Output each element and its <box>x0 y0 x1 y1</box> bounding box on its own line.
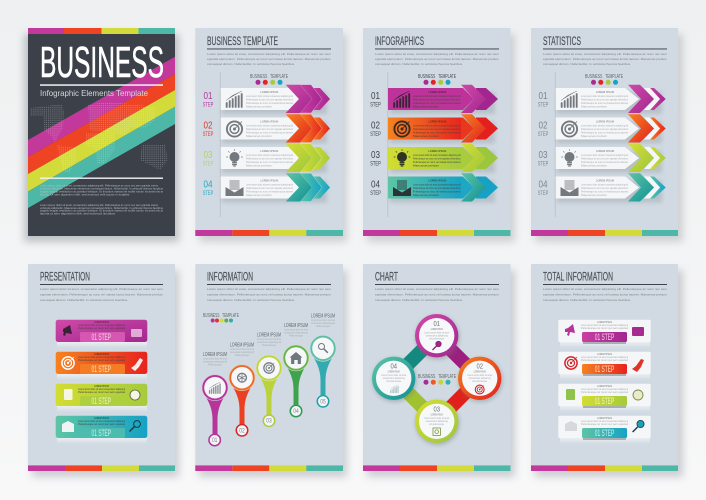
card 1: Pellentesque ac nunc nec sem egestas <box>581 327 629 330</box>
heading: STATISTICS <box>543 36 581 48</box>
card 4 <box>56 416 147 444</box>
card 3: Lorem ipsum dolor sit amet consectetur adipiscing <box>581 388 629 391</box>
intro text: Lorem ipsum dolor sit amet, consectetur adipiscing elit. Pellentesque ac nunc nec sem <box>543 52 668 56</box>
step row 03: Pellentesque ac nunc nec sem egestas elementum <box>581 158 628 161</box>
step row 01: Maecenas pretium <box>581 106 607 109</box>
pin 03: consectetur adipiscing elit <box>257 341 281 344</box>
footer colour bar <box>195 230 343 236</box>
card 3: LOREM IPSUM <box>597 384 612 388</box>
step row 01: LOREM IPSUM <box>260 90 279 94</box>
card 4: Pellentesque ac nunc nec sem egestas <box>581 423 629 426</box>
pin 01: LOREM IPSUM <box>203 352 227 358</box>
card 2: LOREM IPSUM <box>94 352 109 356</box>
card 1: LOREM IPSUM <box>94 320 109 324</box>
card 1: 01 STEP <box>92 332 111 342</box>
card 1: LOREM IPSUM <box>597 320 612 324</box>
intro text: consequat dictum. Nulla facilisi. In vehicula rhoncus faucibus. <box>207 298 295 302</box>
step row 04 <box>203 173 330 202</box>
step row 01: Maecenas pretium <box>413 106 439 109</box>
card 4: LOREM IPSUM <box>597 416 612 420</box>
heading: PRESENTATION <box>40 272 90 284</box>
panel: information <box>195 264 347 477</box>
step row 03: Maecenas pretium <box>581 165 607 168</box>
step row 04: 04 <box>371 178 380 190</box>
step row 01: Pellentesque ac nunc nec sem egestas elementum <box>246 99 293 102</box>
card 2 <box>56 352 147 380</box>
step row 02: LOREM IPSUM <box>596 120 614 124</box>
intro text: consequat dictum. Nulla facilisi. In vehicula rhoncus faucibus. <box>207 62 295 66</box>
legend <box>203 313 239 322</box>
pin 02: LOREM IPSUM <box>230 342 254 348</box>
step row 04: Pellentesque ac nunc nec sem egestas elementum <box>413 187 461 190</box>
step row 03: Maecenas pretium <box>413 165 439 168</box>
panel: statistics <box>531 28 683 242</box>
pin 01 <box>202 352 228 446</box>
card 2: Lorem ipsum dolor sit amet consectetur adipiscing <box>581 356 629 359</box>
footer colour bar <box>531 465 678 471</box>
step row 04: LOREM IPSUM <box>260 178 279 182</box>
node 04: consectetur adipiscing <box>383 377 405 380</box>
step row 04: Pellentesque ac nunc vel massa luctus laoreet <box>581 191 628 194</box>
cover body text: vehicula sollicitudin. Maecenas elementum consequat dictum. Nulla facilisi. In vehicula rhoncus faucibus <box>40 186 164 190</box>
node 01: 01 <box>433 319 440 328</box>
intro text: Lorem ipsum dolor sit amet, consectetur adipiscing elit. Pellentesque ac nunc nec sem <box>375 287 500 291</box>
intro text: Lorem ipsum dolor sit amet, consectetur adipiscing elit. Pellentesque ac nunc nec sem <box>207 52 332 56</box>
step row 01: Pellentesque ac nunc nec sem egestas elementum <box>413 99 461 102</box>
cover body text: Lorem ipsum dolor sit amet, consectetur adipiscing elit. Pellentesque ac nunc nec sem gravida metus <box>40 203 159 207</box>
heading: BUSINESS TEMPLATE <box>207 36 278 48</box>
intro text <box>40 287 164 302</box>
step row 04: Maecenas pretium <box>413 194 439 197</box>
cover colour stripes <box>28 57 175 208</box>
step row 04: Pellentesque ac nunc vel massa luctus laoreet <box>246 191 293 194</box>
pin 04: consectetur adipiscing elit <box>284 331 308 334</box>
pin 05: LOREM IPSUM <box>311 313 335 319</box>
step row 03: 03 <box>204 149 213 161</box>
card 3: Lorem ipsum dolor sit amet consectetur adipiscing <box>78 388 126 391</box>
step row 02 <box>203 114 330 144</box>
intro text: Lorem ipsum dolor sit amet, consectetur adipiscing elit. Pellentesque ac nunc nec sem <box>543 287 668 291</box>
step row 03: 03 <box>371 149 380 161</box>
step row 02: LOREM IPSUM <box>428 120 447 124</box>
step row 04: Lorem ipsum dolor sit amet consectetur adipiscing elit <box>413 184 461 186</box>
step row 02: Pellentesque ac nunc nec sem egestas elementum <box>413 128 461 131</box>
cover body text: Lorem ipsum dolor sit amet, consectetur adipiscing elit. Pellentesque ac nunc nec sem gravida metus <box>40 184 159 188</box>
card 1 <box>558 320 651 348</box>
pin 02 <box>229 342 255 437</box>
card 3: Pellentesque ac nunc nec sem egestas <box>78 391 126 394</box>
step row 04: Lorem ipsum dolor sit amet consectetur adipiscing elit <box>581 184 628 186</box>
footer colour bar <box>363 465 510 471</box>
step row 01: 01 <box>371 90 380 102</box>
pin 01: Pellentesque <box>208 364 223 366</box>
step row 04 <box>370 173 498 202</box>
card 2: Pellentesque ac nunc nec sem egestas <box>581 359 629 362</box>
pin 04: 04 <box>293 409 299 415</box>
step row 03: LOREM IPSUM <box>260 149 279 153</box>
pin 04: Lorem ipsum dolor sit amet <box>284 328 308 331</box>
card 4: 01 STEP <box>595 428 614 438</box>
step row 04: Lorem ipsum dolor sit amet consectetur adipiscing elit <box>246 184 293 186</box>
step row 01 <box>370 85 498 114</box>
step row 01 <box>538 85 666 114</box>
node 03: elit pellentesque <box>429 423 445 426</box>
node 04 <box>372 357 416 402</box>
step row 04: 04 <box>538 178 548 190</box>
panel: presentation <box>28 264 179 477</box>
step row 01: Lorem ipsum dolor sit amet consectetur adipiscing elit <box>581 95 628 98</box>
card 3: LOREM IPSUM <box>94 384 109 388</box>
intro text: Lorem ipsum dolor sit amet, consectetur adipiscing elit. Pellentesque ac nunc nec sem <box>40 287 164 291</box>
pin 02: Pellentesque <box>235 354 250 357</box>
step row 01 <box>203 85 330 114</box>
step row 04: Maecenas pretium <box>246 194 272 197</box>
pin 01: 01 <box>212 438 218 444</box>
card 1: Lorem ipsum dolor sit amet consectetur adipiscing <box>78 324 126 327</box>
card 4: Pellentesque ac nunc nec sem egestas <box>78 423 126 426</box>
panel: chart <box>363 264 515 477</box>
cover title: BUSINESS <box>40 38 164 87</box>
intro text: egestas elementum. Pellentesque ac nunc vel massa luctus laoreet. Maecenas pretium <box>375 292 500 296</box>
step row 03: Maecenas pretium <box>246 165 272 168</box>
node 01 <box>415 314 460 360</box>
card 2: LOREM IPSUM <box>597 352 612 356</box>
step row 01: STEP <box>203 103 213 109</box>
step row 01: STEP <box>370 103 381 109</box>
cover body text: sagittis feugiat vestibulum ac porttitor tristique. Ut tincidunt massa vel mollis rutrum sit amet nisi at <box>40 209 163 213</box>
step row 02: 02 <box>204 120 213 132</box>
node 03: LOREM IPSUM <box>431 413 443 417</box>
node 01: elit pellentesque <box>429 338 445 340</box>
step row 03: Lorem ipsum dolor sit amet consectetur adipiscing elit <box>581 154 628 157</box>
node 02: elit pellentesque <box>472 380 488 383</box>
legend <box>250 74 288 85</box>
step row 04: 04 <box>204 178 213 190</box>
step row 02: Pellentesque ac nunc nec sem egestas elementum <box>581 128 628 131</box>
legend: BUSINESS TEMPLATE <box>203 313 239 319</box>
heading: TOTAL INFORMATION <box>543 272 613 284</box>
step row 03: Pellentesque ac nunc nec sem egestas elementum <box>246 158 293 161</box>
card 4: LOREM IPSUM <box>94 416 109 420</box>
pin 03: 03 <box>266 419 272 425</box>
card 2: 01 STEP <box>595 364 614 374</box>
step row 02 <box>538 114 666 144</box>
step row 01: Lorem ipsum dolor sit amet consectetur adipiscing elit <box>413 95 461 98</box>
step row 03: Pellentesque ac nunc vel massa luctus laoreet <box>581 161 628 164</box>
card 1: Pellentesque ac nunc nec sem egestas <box>78 327 126 330</box>
pin 04: Pellentesque <box>289 334 304 337</box>
step row 01: 01 <box>538 90 548 102</box>
step row 04: STEP <box>203 191 213 197</box>
node 03: 03 <box>433 404 440 414</box>
heading: INFORMATION <box>207 272 253 284</box>
pin 05: consectetur adipiscing elit <box>311 322 335 325</box>
pin 02: consectetur adipiscing elit <box>230 351 254 354</box>
cover body text <box>40 184 164 216</box>
step row 04: Pellentesque ac nunc nec sem egestas elementum <box>246 187 293 190</box>
intro text <box>375 287 500 302</box>
card 3: Pellentesque ac nunc nec sem egestas <box>581 391 629 394</box>
intro text: egestas elementum. Pellentesque ac nunc vel massa luctus laoreet. Maecenas pretium <box>375 57 500 61</box>
step row 01: Pellentesque ac nunc nec sem egestas elementum <box>581 99 628 102</box>
step row 04 <box>538 173 666 202</box>
step row 03: Pellentesque ac nunc vel massa luctus laoreet <box>413 161 461 164</box>
step row 04: STEP <box>370 191 381 197</box>
step row 02: Maecenas pretium <box>246 135 272 138</box>
node 03 <box>415 400 460 445</box>
intro text <box>375 52 500 66</box>
card 4: Lorem ipsum dolor sit amet consectetur adipiscing <box>581 420 629 423</box>
panel: business template <box>195 28 347 242</box>
node 03: Lorem ipsum dolor sit amet <box>424 417 450 420</box>
step row 04: Pellentesque ac nunc vel massa luctus laoreet <box>413 191 461 194</box>
connector bars <box>394 336 480 421</box>
card 2: Pellentesque ac nunc nec sem egestas <box>78 359 126 362</box>
intro text: egestas elementum. Pellentesque ac nunc vel massa luctus laoreet. Maecenas pretium <box>207 292 332 296</box>
step row 03: LOREM IPSUM <box>596 149 614 153</box>
footer colour bar <box>531 230 678 236</box>
pin 02: 02 <box>239 428 245 434</box>
card 4: Lorem ipsum dolor sit amet consectetur adipiscing <box>78 420 126 423</box>
cover body text: sagittis feugiat vestibulum ac porttitor tristique. Ut tincidunt massa vel mollis rutrum sit amet nisi at <box>40 190 163 194</box>
step row 01: Lorem ipsum dolor sit amet consectetur adipiscing elit <box>246 95 293 98</box>
intro text: egestas elementum. Pellentesque ac nunc vel massa luctus laoreet. Maecenas pretium <box>543 292 668 296</box>
step row 03: LOREM IPSUM <box>428 149 447 153</box>
step row 02: STEP <box>203 132 213 138</box>
footer colour bar <box>195 465 343 471</box>
legend: BUSINESS TEMPLATE <box>585 74 623 80</box>
step row 04: Pellentesque ac nunc nec sem egestas elementum <box>581 187 628 190</box>
node 02: 02 <box>476 362 483 370</box>
step row 02: Pellentesque ac nunc vel massa luctus laoreet <box>581 132 628 135</box>
dotted world map <box>30 103 168 172</box>
panel: total information <box>531 264 683 477</box>
legend <box>418 74 456 85</box>
card 2: 01 STEP <box>92 364 111 374</box>
intro text <box>543 287 668 302</box>
node 04: Lorem ipsum dolor sit amet <box>381 374 407 377</box>
cover body text: lacinia ut sem dignissim nibh, sed euismod tincidunt. <box>40 212 116 216</box>
node 02 <box>458 357 502 402</box>
step row 01: Pellentesque ac nunc vel massa luctus laoreet <box>581 102 628 105</box>
step row 03: Pellentesque ac nunc nec sem egestas elementum <box>413 158 461 161</box>
card 3 <box>558 384 651 412</box>
intro text: egestas elementum. Pellentesque ac nunc vel massa luctus laoreet. Maecenas pretium <box>207 57 332 61</box>
step row 01: Maecenas pretium <box>246 106 272 109</box>
step row 01: LOREM IPSUM <box>596 90 614 94</box>
legend <box>585 74 623 85</box>
step row 02: 02 <box>371 120 380 132</box>
pin 02: Lorem ipsum dolor sit amet <box>230 348 254 351</box>
intro text <box>207 287 332 302</box>
centre legend <box>418 374 456 385</box>
intro text <box>543 52 668 66</box>
step row 03 <box>538 144 666 173</box>
step row 02: Maecenas pretium <box>581 135 607 138</box>
step row 03: STEP <box>538 162 548 168</box>
node 04: 04 <box>390 362 397 370</box>
pin 03: Lorem ipsum dolor sit amet <box>257 338 281 341</box>
pin 01: Lorem ipsum dolor sit amet <box>203 358 227 360</box>
centre legend: BUSINESS TEMPLATE <box>418 374 456 380</box>
step row 02: 02 <box>538 120 548 132</box>
intro text: consequat dictum. Nulla facilisi. In vehicula rhoncus faucibus. <box>375 298 463 302</box>
step row 02: Pellentesque ac nunc nec sem egestas elementum <box>246 128 293 131</box>
step row 02: LOREM IPSUM <box>260 120 279 124</box>
node 04: LOREM IPSUM <box>388 370 400 374</box>
pin 04: LOREM IPSUM <box>284 323 308 329</box>
pin 03 <box>256 333 282 427</box>
cover body text: vehicula sollicitudin. Maecenas elementum consequat dictum. Nulla facilisi. In vehicula rhoncus faucibus <box>40 206 164 210</box>
pin 05: Pellentesque <box>316 325 331 328</box>
step row 02: Pellentesque ac nunc vel massa luctus laoreet <box>413 132 461 135</box>
footer colour bar <box>363 230 510 236</box>
step row 02: Maecenas pretium <box>413 135 439 138</box>
pin 03: Pellentesque <box>262 344 277 347</box>
heading: INFOGRAPHICS <box>375 36 424 48</box>
step row 02: STEP <box>370 132 381 138</box>
step row 02: STEP <box>538 132 548 138</box>
intro text: Lorem ipsum dolor sit amet, consectetur adipiscing elit. Pellentesque ac nunc nec sem <box>375 52 500 56</box>
card 1: 01 STEP <box>595 332 614 342</box>
footer colour bar <box>28 465 175 471</box>
card 3: 01 STEP <box>595 396 614 406</box>
step row 03: STEP <box>203 162 213 168</box>
card 4 <box>558 416 651 444</box>
cover top colour bar <box>28 28 175 34</box>
legend: BUSINESS TEMPLATE <box>418 74 456 80</box>
node 02: LOREM IPSUM <box>474 370 486 374</box>
step row 02: Pellentesque ac nunc vel massa luctus laoreet <box>246 132 293 135</box>
step row 03: Lorem ipsum dolor sit amet consectetur adipiscing elit <box>413 154 461 157</box>
step row 03 <box>203 144 330 173</box>
card 1: Lorem ipsum dolor sit amet consectetur adipiscing <box>581 324 629 327</box>
card 3: 01 STEP <box>92 396 111 406</box>
pin 04 <box>283 323 309 418</box>
step row 01: STEP <box>538 103 548 109</box>
node 03: consectetur adipiscing <box>426 420 448 423</box>
step row 04: STEP <box>538 191 548 197</box>
intro text: egestas elementum. Pellentesque ac nunc vel massa luctus laoreet. Maecenas pretium <box>40 292 164 296</box>
step row 01: LOREM IPSUM <box>428 90 447 94</box>
card 2 <box>558 352 651 380</box>
step row 01: Pellentesque ac nunc vel massa luctus laoreet <box>413 102 461 105</box>
step row 02 <box>370 114 498 144</box>
intro text: Lorem ipsum dolor sit amet, consectetur adipiscing elit. Pellentesque ac nunc nec sem <box>207 287 332 291</box>
step row 04: LOREM IPSUM <box>596 178 614 182</box>
step row 01: Pellentesque ac nunc vel massa luctus laoreet <box>246 102 293 105</box>
card 1 <box>56 320 147 348</box>
intro text: egestas elementum. Pellentesque ac nunc vel massa luctus laoreet. Maecenas pretium <box>543 57 668 61</box>
step row 02: Lorem ipsum dolor sit amet consectetur adipiscing elit <box>581 124 628 128</box>
card 3 <box>56 384 147 412</box>
node 02: Lorem ipsum dolor sit amet <box>467 374 493 377</box>
cover subtitle: Infographic Elements Template <box>40 89 148 98</box>
intro text: consequat dictum. Nulla facilisi. In vehicula rhoncus faucibus. <box>40 298 128 302</box>
step row 03: 03 <box>538 149 548 161</box>
node 02: consectetur adipiscing <box>469 377 491 380</box>
pin 05: Lorem ipsum dolor sit amet <box>311 319 335 322</box>
intro text: consequat dictum. Nulla facilisi. In vehicula rhoncus faucibus. <box>543 62 631 66</box>
node 04: elit pellentesque <box>386 380 402 383</box>
pin 05 <box>310 313 336 408</box>
step row 03: Lorem ipsum dolor sit amet consectetur adipiscing elit <box>246 154 293 157</box>
node 01: Lorem ipsum dolor sit amet <box>424 332 450 334</box>
step row 04: LOREM IPSUM <box>428 178 447 182</box>
step row 02: Lorem ipsum dolor sit amet consectetur adipiscing elit <box>413 124 461 128</box>
panel: cover <box>24 28 179 242</box>
step row 01: 01 <box>204 90 213 102</box>
step row 02: Lorem ipsum dolor sit amet consectetur adipiscing elit <box>246 124 293 128</box>
card 2: Lorem ipsum dolor sit amet consectetur adipiscing <box>78 356 126 359</box>
node 01: consectetur adipiscing <box>426 334 448 338</box>
panel: infographics <box>363 28 515 242</box>
intro text: consequat dictum. Nulla facilisi. In vehicula rhoncus faucibus. <box>375 62 463 66</box>
cover body text: lacinia. Ut sem dignissim nibh, sed euismod velit auctor in sodales. <box>40 192 130 196</box>
step row 03: Pellentesque ac nunc vel massa luctus laoreet <box>246 161 293 164</box>
node 01: LOREM IPSUM <box>431 327 443 331</box>
pin 05: 05 <box>320 399 326 405</box>
intro text <box>207 52 332 66</box>
card 4: 01 STEP <box>92 428 111 438</box>
pin 01: consectetur adipiscing elit <box>203 360 227 364</box>
legend: BUSINESS TEMPLATE <box>250 74 288 80</box>
step row 04: Maecenas pretium <box>581 194 607 197</box>
pin 03: LOREM IPSUM <box>257 333 281 339</box>
step row 03 <box>370 144 498 173</box>
heading: CHART <box>375 272 398 284</box>
step row 03: STEP <box>370 162 381 168</box>
intro text: consequat dictum. Nulla facilisi. In vehicula rhoncus faucibus. <box>543 298 631 302</box>
